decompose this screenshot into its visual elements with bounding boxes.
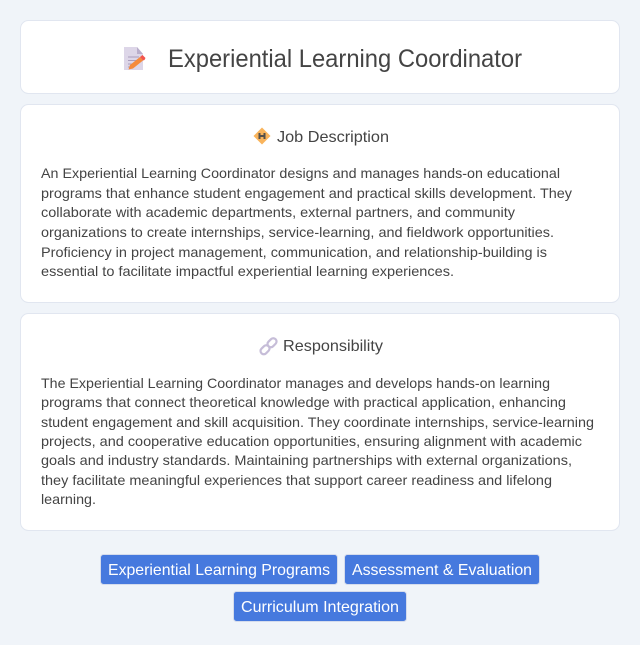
panel: job description: [20, 104, 620, 302]
responsibility text: learning.: [41, 491, 96, 507]
job description text: collaborate with academic departments, external partners, and community: [41, 204, 515, 220]
responsibility text: [41, 375, 594, 507]
job description text: An Experiential Learning Coordinator designs and manages hands-on educational: [41, 165, 560, 181]
tag: assessment and evaluation: Assessment & Evaluation: [352, 562, 532, 579]
title text: Experiential Learning Coordinator: [168, 45, 522, 73]
responsibility text: The Experiential Learning Coordinator manages and develops hands-on learning: [41, 375, 550, 391]
responsibility text: projects, and cooperative education opportunities, ensuring alignment with academic: [41, 433, 582, 449]
job description text: Proficiency in project management, communication, and relationship-building is: [41, 244, 547, 260]
icon: chain link: [259, 337, 278, 356]
tag: curriculum integration: Curriculum Integration: [241, 599, 399, 616]
responsibility text: programs that connect theoretical knowledge with practical application, enhancing: [41, 394, 566, 410]
job description text: essential to facilitate impactful experiential learning experiences.: [41, 263, 454, 279]
job description text: organizations to create internships, service-learning, and fieldwork opportunities.: [41, 224, 554, 240]
heading: job description: Job Description: [277, 129, 389, 146]
icon: orange diamond: [254, 128, 270, 144]
panel: responsibility: [20, 314, 620, 530]
job description text: [41, 165, 572, 279]
icon: document with pencil: [124, 47, 146, 70]
tag: curriculum integration: [234, 592, 406, 622]
job description text: programs that enhance student engagement and practical skills development. They: [41, 185, 572, 201]
responsibility text: student engagement and skill acquisition. They coordinate internships, service-learning: [41, 414, 594, 430]
tag: assessment and evaluation: [344, 554, 540, 584]
responsibility text: they facilitate meaningful experiences that support career readiness and lifelong: [41, 472, 552, 488]
tag: experiential learning programs: [100, 554, 338, 584]
tag: experiential learning programs: Experiential Learning Programs: [108, 562, 330, 579]
responsibility text: goals and industry standards. Maintaining partnerships with external organizations,: [41, 452, 572, 468]
panel: title: [20, 20, 620, 94]
heading: responsibility: Responsibility: [283, 338, 383, 355]
